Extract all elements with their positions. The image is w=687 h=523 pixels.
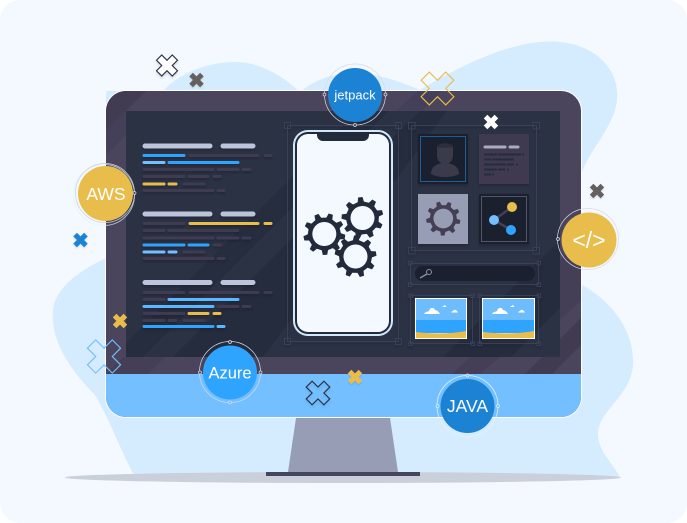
x mark: dark outline on bar [306, 381, 330, 405]
badge: jetpack [323, 64, 387, 126]
background blob [53, 42, 633, 477]
code block 3 [144, 282, 271, 326]
x mark: grey [189, 73, 204, 87]
badge: Azure [198, 340, 262, 404]
image thumbnail 1 [415, 298, 467, 339]
monitor stand [288, 418, 398, 472]
x mark: light blue outline [87, 340, 121, 373]
image thumbnail 2 [482, 298, 535, 339]
x mark: yellow outline [421, 72, 454, 105]
tile: share icon [479, 194, 529, 244]
badge: code: </> [572, 227, 606, 253]
x mark: yellow on bar [348, 370, 362, 384]
tile: document [479, 134, 529, 184]
tile: gear [418, 194, 468, 244]
code editor text lines [144, 146, 271, 326]
tile: profile [418, 134, 468, 184]
code block 1 [144, 146, 271, 190]
badge: jetpack: jetpack [333, 88, 376, 102]
selection frames [284, 122, 540, 346]
badge: code [556, 208, 618, 270]
monitor [105, 90, 582, 418]
badge: JAVA [436, 374, 500, 438]
icon: magnifier [420, 270, 432, 278]
search bar [415, 266, 535, 281]
badge: Azure: Azure [208, 364, 252, 382]
ground shadow [65, 472, 621, 483]
x mark: dark outline [156, 55, 178, 76]
x mark: grey right [590, 184, 604, 198]
monitor base [266, 472, 420, 476]
x mark: white [484, 115, 498, 129]
badge: AWS: AWS [86, 184, 126, 204]
code block 2 [144, 214, 271, 258]
phone [293, 130, 393, 336]
badge: JAVA: JAVA [447, 396, 488, 416]
badge: AWS [74, 164, 136, 226]
x mark: blue [73, 233, 88, 247]
screen [126, 111, 560, 374]
phone notch [317, 134, 369, 141]
x mark: yellow left [113, 314, 127, 328]
icon: gears [301, 191, 390, 280]
